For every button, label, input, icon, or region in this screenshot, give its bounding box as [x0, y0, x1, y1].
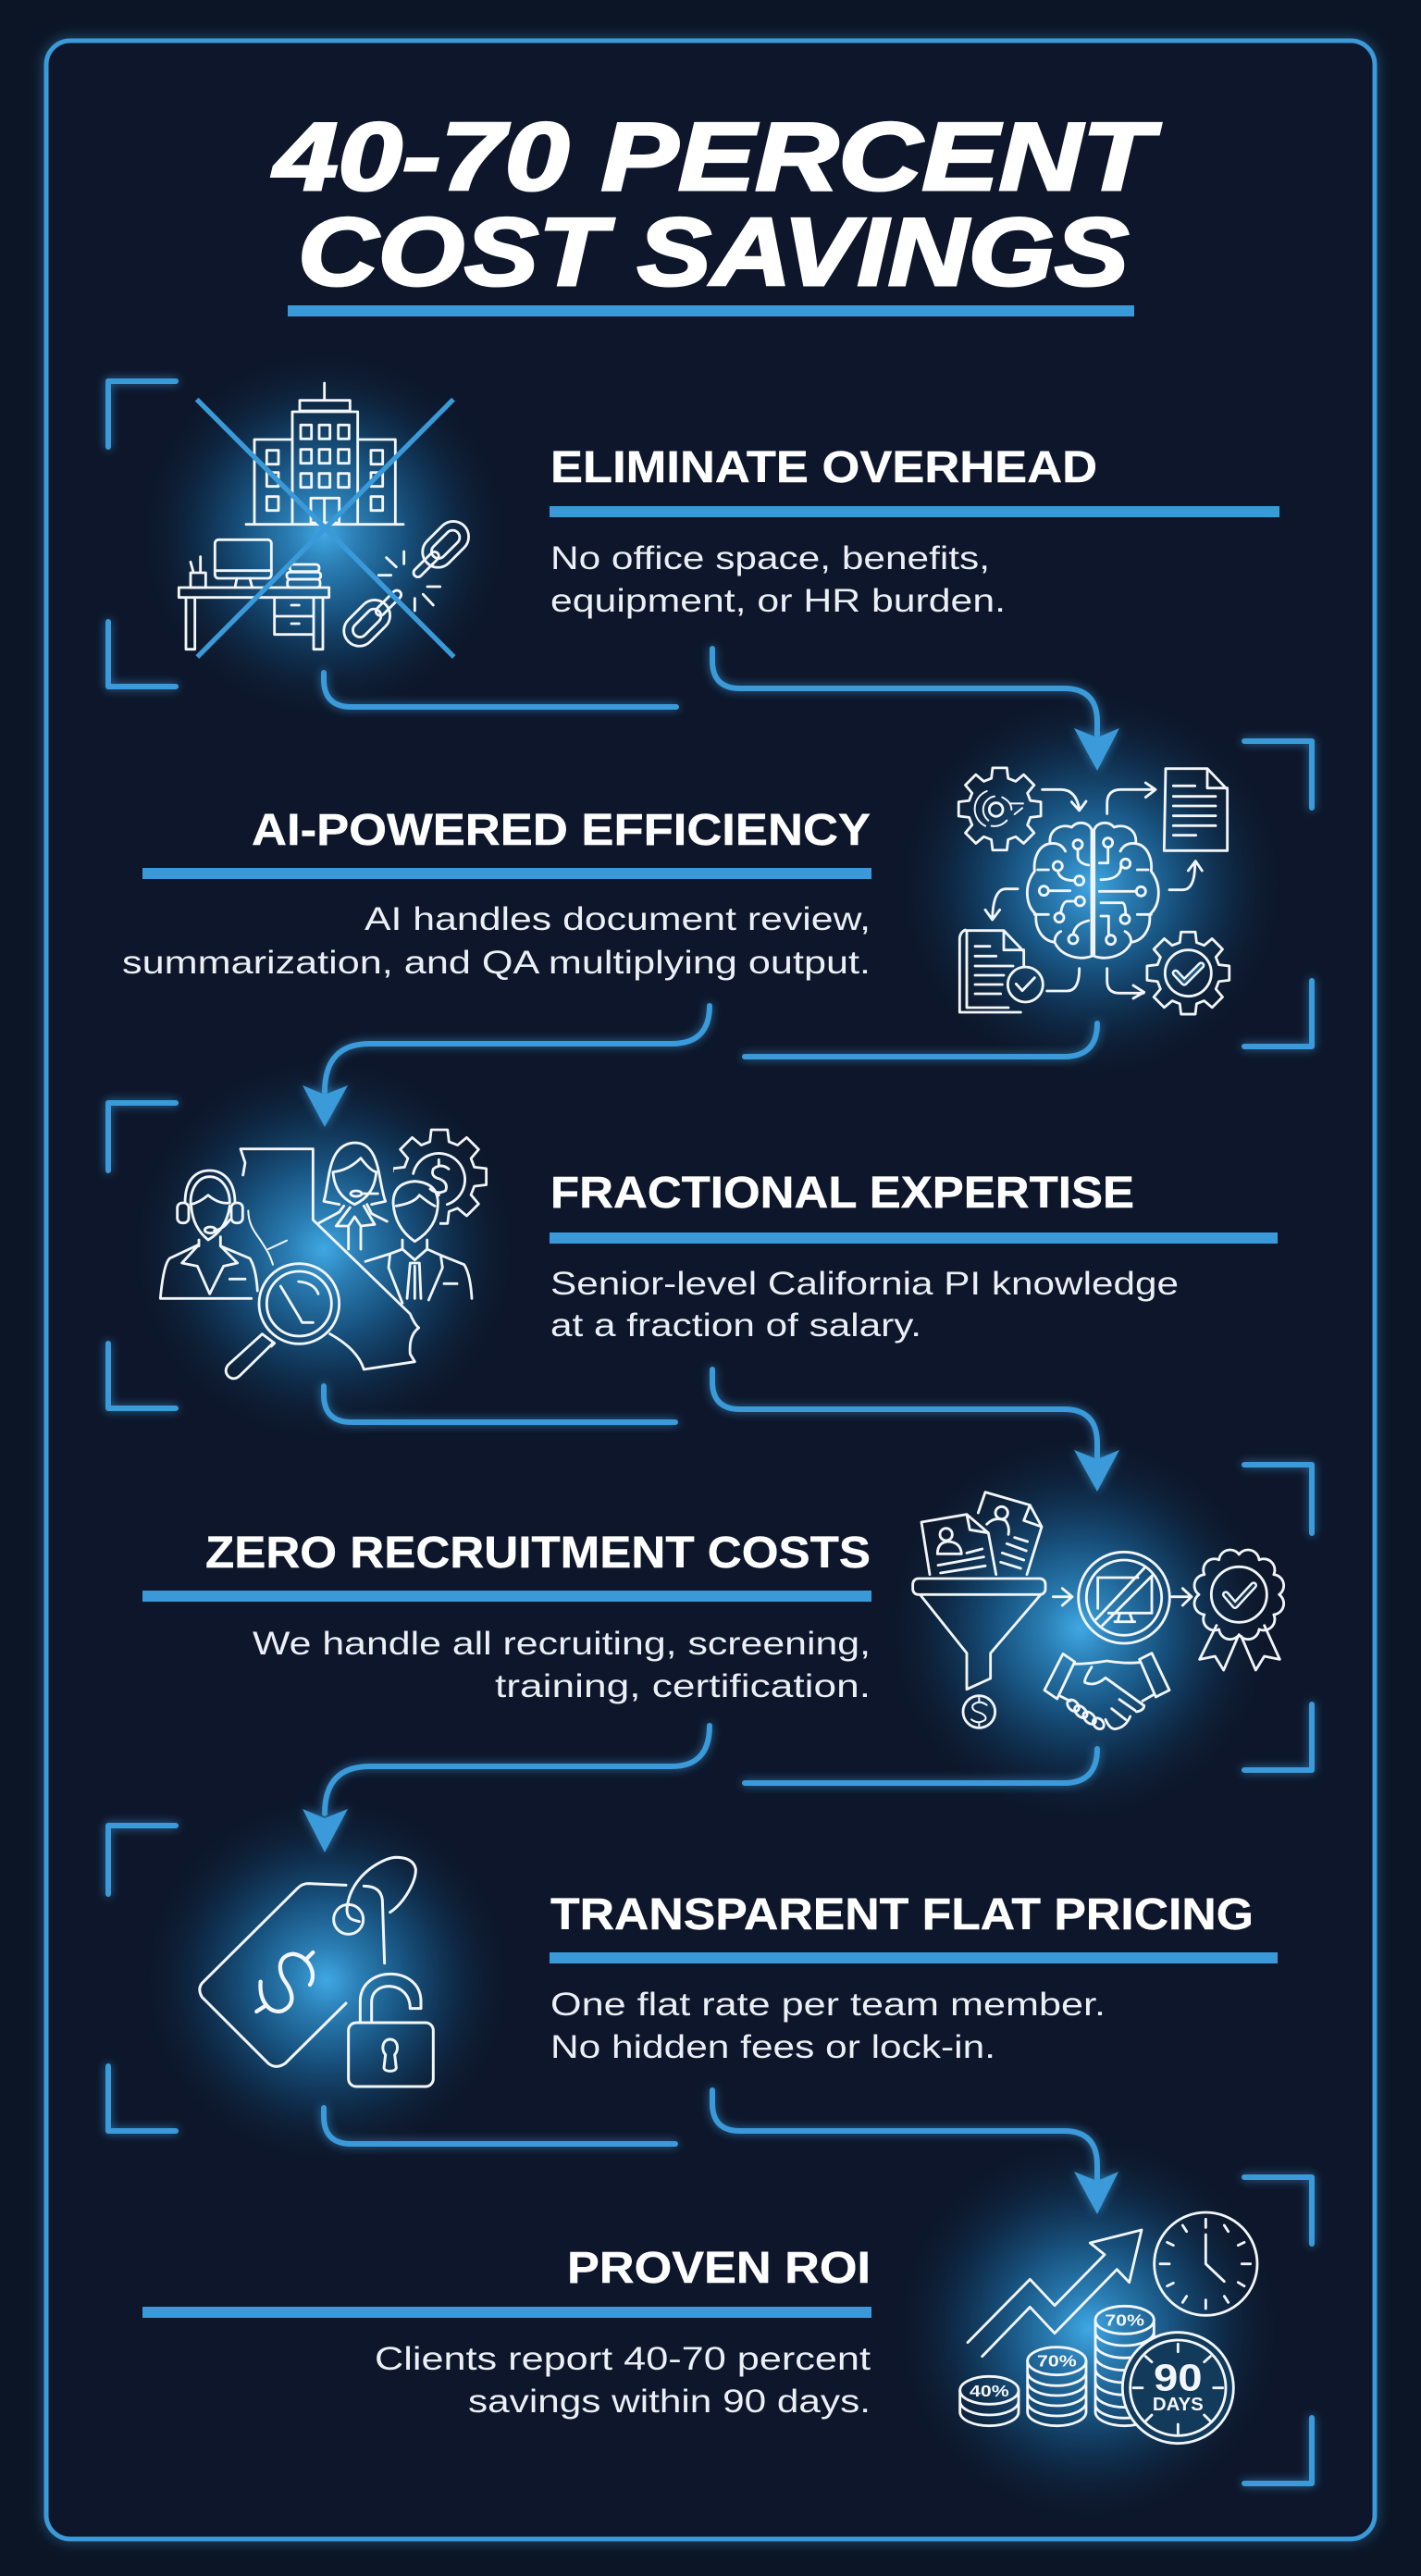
- corner brackets: [108, 381, 176, 687]
- heading: AI-POWERED EFFICIENCY: [252, 806, 871, 855]
- body text: [122, 901, 871, 981]
- body text: at a fraction of salary.: [550, 1307, 921, 1344]
- connector 5: [324, 2108, 675, 2144]
- body text: We handle all recruiting, screening,: [253, 1626, 871, 1662]
- arrow: step 4 to step 5: [303, 1726, 710, 1852]
- heading: ELIMINATE OVERHEAD: [550, 443, 1097, 492]
- body text: Clients report 40-70 percent: [375, 2341, 871, 2377]
- icon: growth arrow, clock, coin stacks and 90 days timer: 70%: [1037, 2351, 1077, 2370]
- arrow: step 3 to step 4: [712, 1369, 1119, 1492]
- icon: growth arrow, clock, coin stacks and 90 days timer: [960, 2212, 1257, 2444]
- body text: [550, 1266, 1179, 1344]
- glow: [134, 344, 513, 724]
- body text: [253, 1626, 871, 1704]
- icon: AI brain with documents and gears: [958, 768, 1229, 1014]
- heading: PROVEN ROI: [567, 2244, 871, 2293]
- icon: growth arrow, clock, coin stacks and 90 days timer: 40%: [970, 2382, 1009, 2400]
- body text: Senior-level California PI knowledge: [550, 1266, 1179, 1302]
- panel: eliminate overhead: [108, 344, 1279, 724]
- icon: California map, team and magnifier: [160, 1130, 487, 1379]
- body text: savings within 90 days.: [468, 2384, 871, 2420]
- panel: transparent flat pricing: [108, 1790, 1278, 2170]
- corner brackets: [1244, 2177, 1312, 2483]
- heading: TRANSPARENT FLAT PRICING: [550, 1890, 1254, 1939]
- icon: growth arrow, clock, coin stacks and 90 days timer: 90: [1154, 2356, 1203, 2398]
- connector 2: [745, 1023, 1097, 1057]
- arrow: step 5 to step 6: [712, 2090, 1118, 2214]
- panel: ai-powered efficiency: [122, 687, 1312, 1084]
- heading: ZERO RECRUITMENT COSTS: [205, 1529, 871, 1578]
- corner brackets: [108, 1826, 176, 2131]
- icon: growth arrow, clock, coin stacks and 90 days timer: DAYS: [1153, 2394, 1204, 2415]
- glow: [893, 687, 1291, 1084]
- glow: [881, 1430, 1279, 1827]
- underline: [550, 1232, 1278, 1244]
- icon: recruiting funnel, handshake and certification badge: [913, 1492, 1284, 1731]
- corner brackets: [108, 1103, 176, 1408]
- body text: [550, 540, 1006, 619]
- corner brackets: [1244, 1465, 1312, 1770]
- body text: training, certification.: [495, 1668, 871, 1704]
- body text: No office space, benefits,: [550, 540, 990, 576]
- connector 4: [745, 1749, 1097, 1783]
- body text: One flat rate per team member.: [550, 1987, 1106, 2023]
- underline: [550, 1952, 1278, 1963]
- glow: [137, 1790, 516, 2170]
- icon: crossed-out office, desk and broken chain: [179, 383, 475, 657]
- body text: equipment, or HR burden.: [550, 583, 1006, 619]
- connector 1: [324, 673, 676, 707]
- corner brackets: [1244, 741, 1312, 1046]
- underline: [142, 2307, 871, 2318]
- heading: FRACTIONAL EXPERTISE: [550, 1169, 1134, 1218]
- underline: [142, 868, 871, 879]
- title: COST SAVINGS: [298, 199, 1129, 306]
- panel: zero recruitment costs: [142, 1430, 1312, 1827]
- underline: [550, 506, 1279, 517]
- icon: price tag and open padlock: [200, 1857, 433, 2087]
- body text: summarization, and QA multiplying output.: [122, 945, 871, 981]
- body text: AI handles document review,: [365, 901, 871, 937]
- panel: proven roi: [142, 2130, 1312, 2528]
- icon: growth arrow, clock, coin stacks and 90 days timer: 70%: [1105, 2310, 1144, 2329]
- title: 40-70 PERCENT: [272, 104, 1161, 211]
- arrow: step 2 to step 3: [303, 1006, 710, 1127]
- title: [272, 104, 1161, 316]
- underline: [142, 1591, 871, 1602]
- arrow: step 1 to step 2: [712, 649, 1119, 771]
- glow: [890, 2130, 1288, 2528]
- body text: [550, 1987, 1106, 2065]
- connector 3: [324, 1386, 675, 1422]
- body text: No hidden fees or lock-in.: [550, 2029, 995, 2065]
- panel: fractional expertise: [108, 1050, 1278, 1448]
- glow: [125, 1050, 523, 1448]
- body text: [375, 2341, 871, 2420]
